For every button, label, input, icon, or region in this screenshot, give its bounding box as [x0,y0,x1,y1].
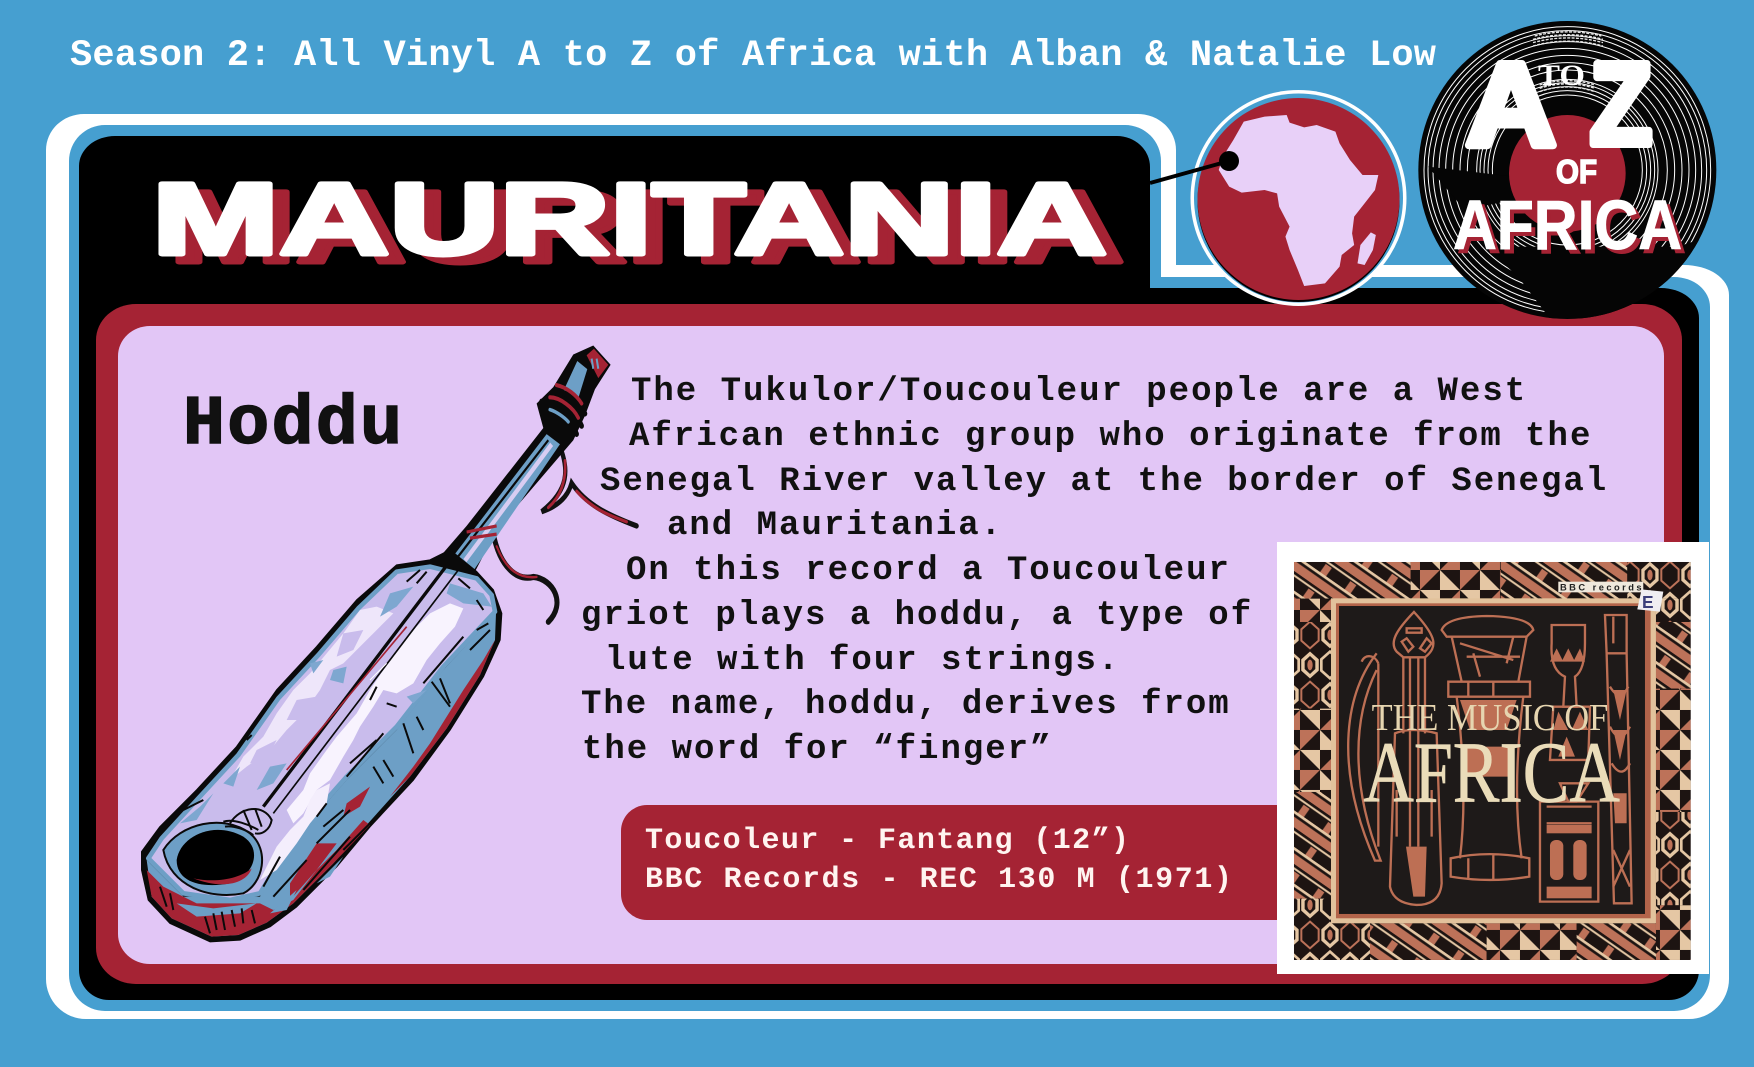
dark wedges [1428,167,1718,320]
text block: description: African ethnic group who originate from the [629,418,1592,456]
album cover: The Music of Africa: E [1642,592,1654,612]
BBC logo [1558,582,1643,592]
right band [1656,599,1691,622]
lettering A, TO, Z: A [1466,39,1556,171]
logo: A to Z of Africa vinyl record: TO [1538,59,1585,92]
cover text: THE MUSIC OF [1372,697,1608,739]
album cover: The Music of Africa: AFRICA [1363,724,1620,821]
album cover: The Music of Africa [1277,542,1709,974]
pointer: Mauritania location [1150,151,1239,183]
inner frame [1331,598,1656,923]
logo: A to Z of Africa vinyl record: OF [1556,153,1597,190]
record details text [645,824,1232,897]
text block: description: the word for “finger” [582,731,1052,769]
left band [1294,599,1332,622]
top face [148,567,495,900]
bottom band [1332,923,1370,960]
text block: description: Senegal River valley at the border of Senegal [600,463,1608,501]
header text: Season 2: All Vinyl A to Z of Africa with Alban & Natalie Low [70,35,1436,77]
lettering AFRICA: AFRICA [1457,190,1686,268]
groove texture [1533,32,1603,92]
string anchor [223,808,272,835]
sound hole [163,823,262,895]
title: MAURITANIA: MAURITANIA [152,162,1107,276]
text block: description: lute with four strings. [605,642,1120,680]
lettering A, TO, Z: Z [1590,39,1652,169]
side face [147,613,496,937]
record details text: Toucoleur - Fantang (12”) [645,824,1129,858]
label [1509,115,1626,232]
ridge [263,563,448,807]
text block: description: and Mauritania. [667,507,1003,545]
vinyl disc [1418,21,1716,319]
map: Africa [1219,115,1378,286]
blue mottling [180,583,492,823]
text block: description: griot plays a hoddu, a type of [581,597,1253,635]
record details text: BBC Records - REC 130 M (1971) [645,863,1232,897]
lettering A, TO, Z [1466,39,1652,171]
panel: red content border [96,304,1682,984]
top band [1294,562,1411,599]
text block: description [581,373,1608,769]
panel: lilac content area [118,326,1664,964]
title: MAURITANIA: MAURITANIA [169,170,1124,284]
instruments [1348,612,1632,905]
text block: description: The name, hoddu, derives from [581,686,1231,724]
globe with Africa map [1190,90,1406,306]
title: MAURITANIA [152,162,1124,284]
text block: description: The Tukulor/Toucouleur people are a West [631,373,1527,411]
hatching [160,570,490,933]
album cover: The Music of Africa: BBC records [1560,582,1642,592]
logo: A to Z of Africa vinyl record: AFRICA [1453,186,1682,264]
text block: description: On this record a Toucouleur [626,552,1231,590]
panel: record details [621,805,1321,920]
neck, head and thongs [437,346,637,622]
sticker [1637,589,1663,612]
white highlights [287,603,463,823]
body [142,550,502,942]
logo: A to Z of Africa vinyl record [1418,21,1718,320]
heading: Hoddu: Hoddu [183,386,402,465]
illustration: hoddu lute [142,346,637,942]
